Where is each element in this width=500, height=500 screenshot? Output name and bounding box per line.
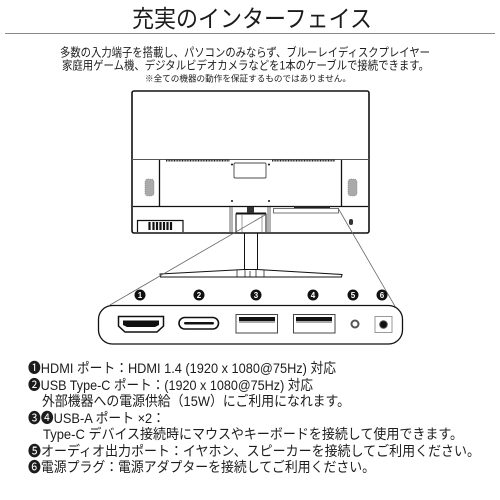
ports panel: [98, 306, 402, 344]
intro text: 多数の入力端子を搭載し、パソコンのみならず、ブルーレイディスクプレイヤー: [60, 44, 430, 60]
monitor rear illustration: [132, 91, 369, 277]
intro text: 家庭用ゲーム機、デジタルビデオカメラなどを1本のケーブルで接続できます。: [62, 58, 429, 72]
port number badges: 1: [138, 291, 143, 300]
leader lines: [110, 208, 396, 308]
port descriptions: ❻電源プラグ：電源アダプターを接続してご利用ください。: [28, 459, 375, 475]
speaker grilles: [145, 179, 154, 196]
port descriptions: Type-C デバイス接続時にマウスやキーボードを接続して使用できます。: [43, 426, 463, 442]
port descriptions: [28, 360, 480, 475]
rear centre panel: [133, 160, 368, 206]
icon: HDMI port: [118, 316, 164, 332]
stand neck: [244, 233, 258, 270]
stand base: [160, 270, 342, 277]
port number badges: [134, 290, 388, 300]
monitor outer body: [132, 91, 369, 233]
security lock: [349, 219, 353, 225]
port number badges: 2: [197, 291, 202, 300]
icon: power port: [375, 316, 392, 332]
port number badges: 4: [311, 291, 316, 300]
port descriptions: ❶HDMI ポート：HDMI 1.4 (1920 x 1080@75Hz) 対応: [28, 360, 336, 376]
icon: USB Type-C port: [179, 318, 218, 329]
icon: USB-A port 3: [236, 314, 278, 333]
port number badges: 3: [254, 291, 259, 300]
port descriptions: ❸❹USB-A ポート ×2：: [28, 410, 165, 426]
title: 充実のインターフェイス: [132, 6, 372, 33]
rear vent: [138, 220, 183, 232]
port cover: [274, 206, 338, 213]
icon: USB-A port 4: [294, 314, 335, 333]
port descriptions: 外部機器への電源供給（15W）にご利用になれます。: [42, 393, 350, 409]
intro text: [60, 44, 430, 84]
stand bracket: [230, 207, 270, 232]
port descriptions: ❷USB Type-C ポート：(1920 x 1080@75Hz) 対応: [28, 377, 313, 393]
intro text: ※全ての機器の動作を保証するものではありません。: [145, 72, 351, 84]
port number badges: 5: [351, 291, 356, 300]
port number badges: 6: [380, 291, 385, 300]
icon: audio port: [352, 320, 358, 328]
